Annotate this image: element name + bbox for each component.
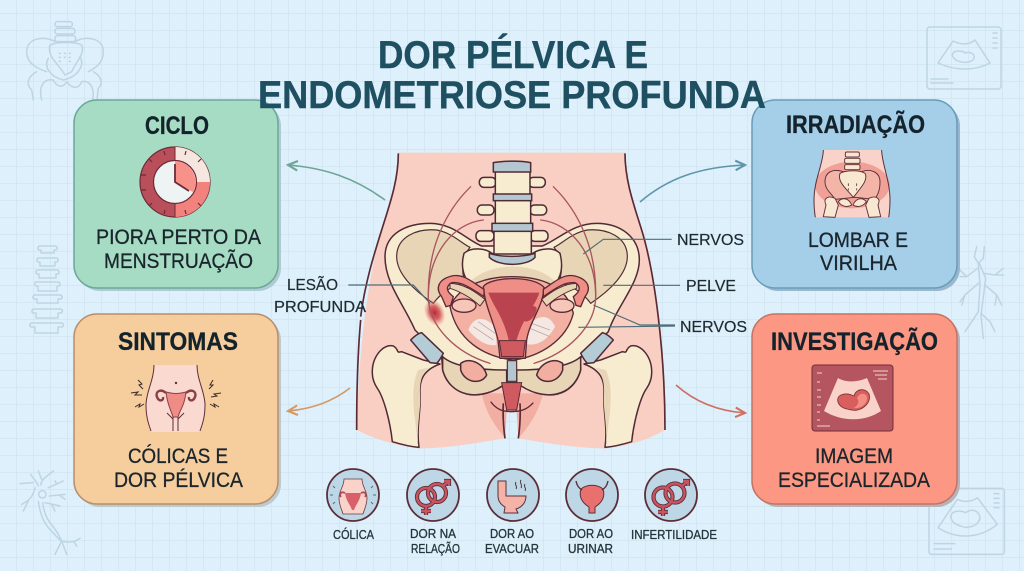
background icon: spine — [30, 246, 63, 333]
icon: abdomen with uterus — [131, 365, 221, 432]
symptom: infertilidade — [631, 469, 717, 542]
hip joints and femurs — [372, 333, 652, 447]
arrow: pelvis to sintomas — [288, 388, 350, 411]
label: cólica: CÓLICA — [333, 527, 375, 542]
text: piora perto da menstruação — [96, 226, 261, 273]
arrow: pelvis to ciclo — [288, 165, 385, 200]
icon: cycle clock — [140, 147, 210, 217]
text: imagem especializada: IMAGEM — [815, 445, 893, 468]
label: dor ao urinar: URINAR — [568, 542, 613, 556]
label: dor ao evacuar: DOR AO — [490, 527, 534, 541]
symptom: cólica — [327, 469, 379, 542]
panel: irradiação — [752, 100, 960, 291]
title: ENDOMETRIOSE PROFUNDA — [258, 74, 766, 117]
label: dor na relação: DOR NA — [410, 527, 457, 541]
leader lines — [348, 239, 680, 327]
lesion — [420, 296, 450, 330]
label: dor ao urinar — [568, 527, 613, 556]
text: cólicas e dor pélvica: DOR PÉLVICA — [114, 469, 243, 492]
label: dor na relação: RELAÇÃO — [411, 542, 460, 556]
text: lombar e virilha — [808, 229, 908, 275]
label: lesão profunda: LESÃO — [287, 274, 338, 294]
spine processes — [476, 177, 548, 241]
text: lombar e virilha: LOMBAR E — [808, 229, 908, 252]
text: piora perto da menstruação: PIORA PERTO DA — [96, 226, 261, 249]
central pelvis illustration — [348, 153, 680, 448]
title — [258, 33, 766, 117]
pelvic bones — [385, 223, 639, 395]
text: cólicas e dor pélvica — [114, 445, 243, 492]
lumbar vertebrae — [489, 161, 535, 264]
label: nervos: NERVOS — [677, 232, 744, 249]
icon: ultrasound screen — [812, 365, 893, 431]
symptom: dor ao urinar — [566, 469, 618, 556]
label: dor ao evacuar: EVACUAR — [485, 542, 539, 556]
label: dor na relação — [410, 527, 460, 556]
symptom: dor ao evacuar — [485, 469, 539, 556]
background icon: nerve branches — [958, 247, 1003, 338]
text: imagem especializada — [778, 445, 930, 492]
background icon: neuron — [20, 471, 80, 554]
text: cólicas e dor pélvica: CÓLICAS E — [128, 445, 228, 468]
label: pelve: PELVE — [686, 278, 736, 295]
label: lesão profunda — [274, 274, 366, 316]
panel: ciclo — [74, 100, 281, 291]
body silhouette — [357, 153, 665, 448]
background icon: ultrasound bottom right — [929, 488, 1004, 554]
text: piora perto da menstruação: MENSTRUAÇÃO — [104, 249, 253, 273]
heading: irradiação: IRRADIAÇÃO — [786, 109, 925, 139]
background icon: ultrasound top right — [927, 27, 1001, 89]
nerves — [428, 187, 596, 363]
arrow: pelvis to investigação — [676, 385, 745, 413]
pelvic cavity and uterus — [438, 275, 588, 412]
heading: sintomas: SINTOMAS — [118, 328, 238, 356]
arrow: pelvis to irradiação — [640, 165, 745, 202]
symptom: dor na relação — [407, 469, 460, 556]
panel: investigação — [752, 314, 960, 507]
heading: investigação: INVESTIGAÇÃO — [771, 326, 938, 356]
panel: sintomas — [74, 314, 281, 507]
label: nervos: NERVOS — [680, 319, 747, 336]
label: lesão profunda: PROFUNDA — [274, 299, 366, 316]
background icon: pelvis outline — [27, 22, 103, 102]
icon: pelvis with radiating pain — [814, 150, 890, 217]
heading: ciclo: CICLO — [145, 112, 209, 140]
title: DOR PÉLVICA E — [378, 33, 648, 77]
text: lombar e virilha: VIRILHA — [820, 252, 897, 275]
label: dor ao urinar: DOR AO — [569, 527, 613, 541]
text: imagem especializada: ESPECIALIZADA — [778, 469, 930, 492]
label: dor ao evacuar — [485, 527, 539, 556]
label: infertilidade: INFERTILIDADE — [631, 528, 717, 542]
